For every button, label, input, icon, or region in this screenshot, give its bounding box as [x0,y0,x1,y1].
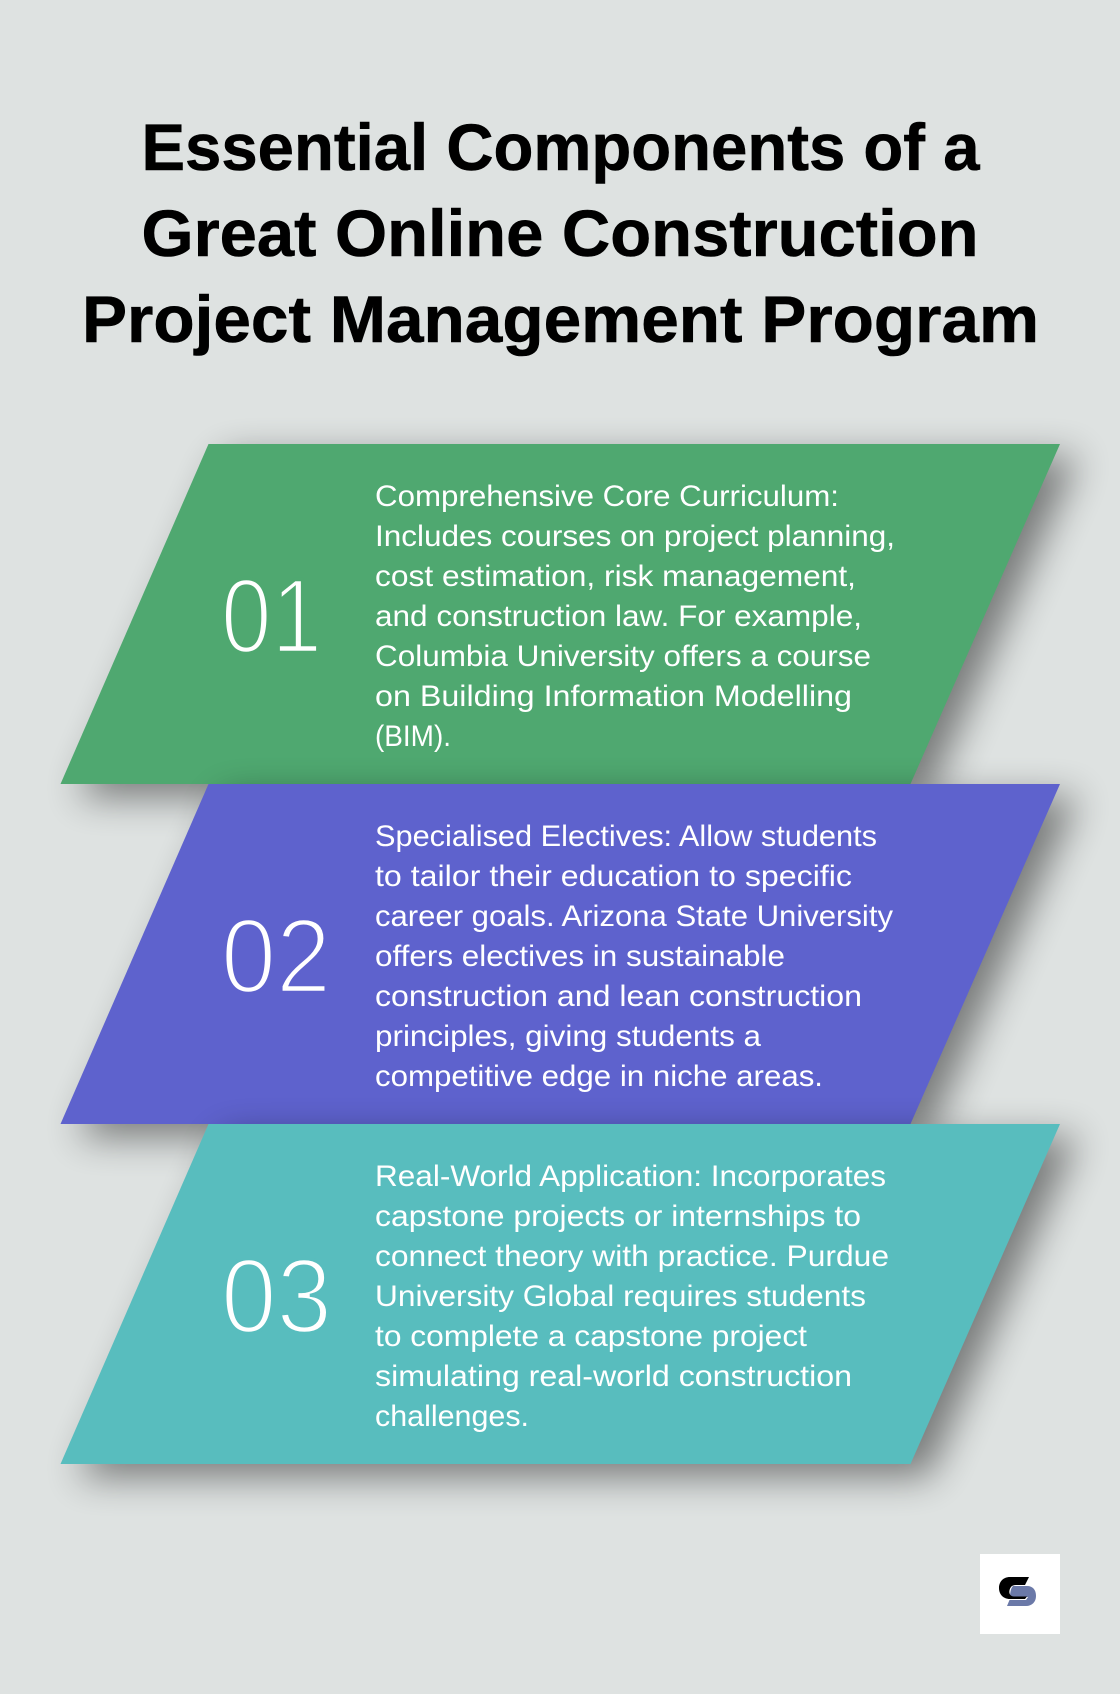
text block 03 [375,1160,889,1433]
text block 01: Columbia University offers a course [375,640,871,673]
number 01: 01 [221,558,322,676]
text block 01: Includes courses on project planning, [375,520,895,553]
panel shape: teal parallelogram [60,1124,1060,1464]
panel: 03 real-world application [60,1124,1060,1464]
text block 02: career goals. Arizona State University [375,900,893,933]
text block 02: competitive edge in niche areas. [375,1060,823,1093]
text block 01: cost estimation, risk management, [375,560,856,593]
number 03: 03 [221,1238,332,1356]
text block 02: Specialised Electives: Allow students [375,820,877,853]
text block 01: and construction law. For example, [375,600,862,633]
text block 03: challenges. [375,1400,529,1433]
title: Project Management Program [82,282,1039,356]
text block 02: principles, giving students a [375,1020,762,1053]
text block 02: offers electives in sustainable [375,940,785,973]
number 02: 02 [221,898,331,1016]
icon: logo badge [980,1554,1060,1634]
text block 03: capstone projects or internships to [375,1200,861,1233]
text block 03: connect theory with practice. Purdue [375,1240,889,1273]
panel: 02 specialised electives [60,784,1060,1124]
text block 03: Real-World Application: Incorporates [375,1160,886,1193]
title: Great Online Construction [142,196,978,270]
panel shape: purple parallelogram [60,784,1060,1124]
panel shape: green parallelogram [60,444,1060,784]
text block 03: to complete a capstone project [375,1320,807,1353]
text block 02: construction and lean construction [375,980,862,1013]
text block 02 [375,820,893,1093]
text block 03: simulating real-world construction [375,1360,852,1393]
text block 02: to tailor their education to specific [375,860,852,893]
panel: 01 comprehensive core curriculum [60,444,1060,784]
text block 01 [375,480,895,753]
title: Essential Components of a [142,110,981,184]
text block 01: (BIM). [375,720,451,753]
text block 01: Comprehensive Core Curriculum: [375,480,839,513]
title [82,110,1039,356]
text block 01: on Building Information Modelling [375,680,852,713]
text block 03: University Global requires students [375,1280,866,1313]
